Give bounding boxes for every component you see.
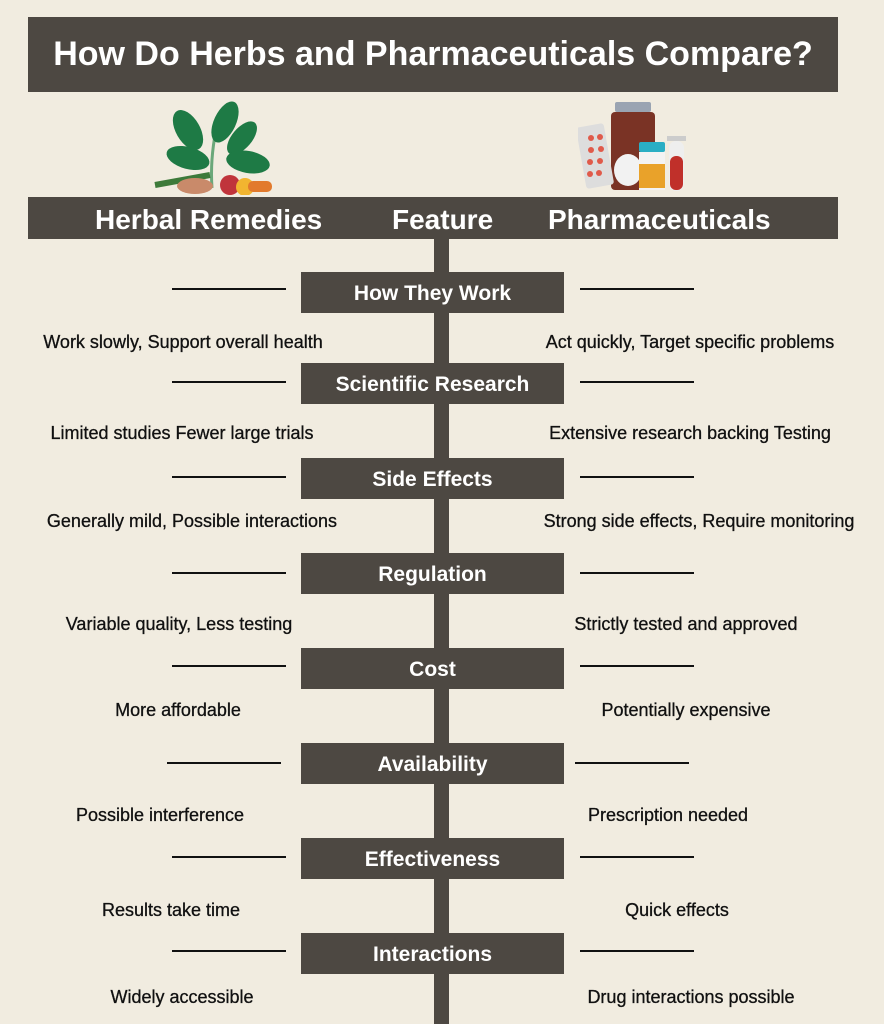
row: Interactions: Widely accessible [110,987,254,1007]
row: How They Work: Act quickly, Target specific problems [546,332,834,352]
row: Availability [76,743,748,826]
row: How They Work: Work slowly, Support overall health [43,332,323,352]
row: Side Effects: Generally mild, Possible interactions [47,511,337,531]
header bar [28,197,838,239]
title [28,17,838,92]
row: Availability: Availability [377,753,488,776]
row: How They Work [43,272,834,352]
row: Effectiveness: Results take time [102,900,240,920]
row: How They Work: How They Work [354,282,511,305]
row: Interactions: Interactions [373,943,492,966]
header bar: Pharmaceuticals [548,204,771,235]
row: Cost: Cost [409,658,456,681]
icon: herbs [154,102,272,195]
row: Regulation [66,553,798,634]
row: Regulation: Regulation [378,563,487,586]
row: Cost [115,648,771,720]
row: Effectiveness: Quick effects [625,900,729,920]
row: Side Effects: Strong side effects, Require monitoring [544,511,854,531]
vertical spine [434,239,449,1024]
icon: pharmaceuticals [578,102,686,191]
row: Side Effects: Side Effects [372,468,493,491]
row: Scientific Research: Scientific Research [336,373,529,396]
row: Interactions [110,933,795,1008]
row: Scientific Research [50,363,831,444]
header bar: Herbal Remedies [95,204,322,235]
row: Effectiveness [102,838,729,920]
row: Regulation: Strictly tested and approved [574,614,798,634]
row: Scientific Research: Extensive research backing Testing [549,423,831,443]
row: Effectiveness: Effectiveness [365,848,500,871]
row: Regulation: Variable quality, Less testing [66,614,292,634]
row: Interactions: Drug interactions possible [587,987,795,1007]
row: Availability: Prescription needed [588,805,748,825]
row: Scientific Research: Limited studies Fewer large trials [50,423,314,443]
row: Availability: Possible interference [76,805,244,825]
title: How Do Herbs and Pharmaceuticals Compare? [53,35,813,73]
row: Cost: Potentially expensive [601,700,771,720]
row: Side Effects [47,458,854,532]
row: Cost: More affordable [115,700,241,720]
header bar: Feature [392,204,493,235]
